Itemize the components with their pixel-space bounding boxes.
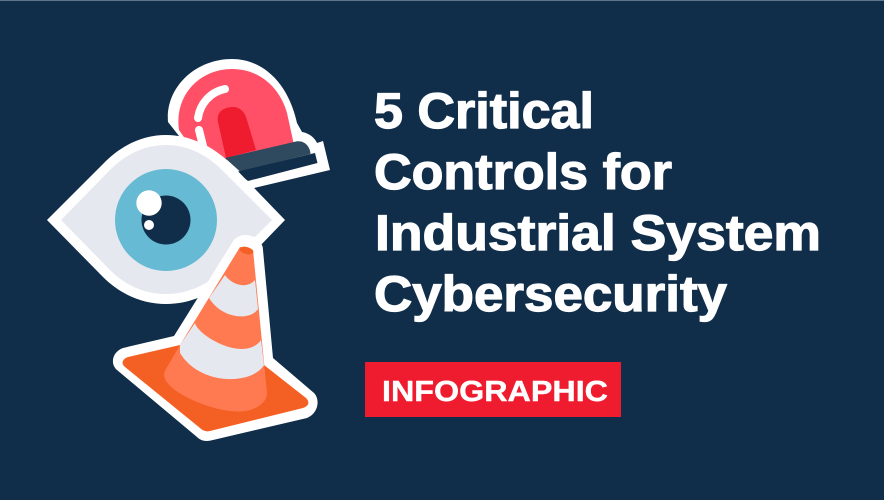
icon: red siren light [168,59,330,189]
icon: traffic cone [113,235,318,441]
title: 5 Critical [374,83,594,139]
badge: infographic: INFOGRAPHIC [382,376,608,408]
title [374,83,821,322]
icon: eye [47,135,285,304]
title: Industrial System [375,205,821,261]
badge: infographic [365,362,621,417]
title: Controls for [374,144,672,200]
title: Cybersecurity [374,266,727,322]
